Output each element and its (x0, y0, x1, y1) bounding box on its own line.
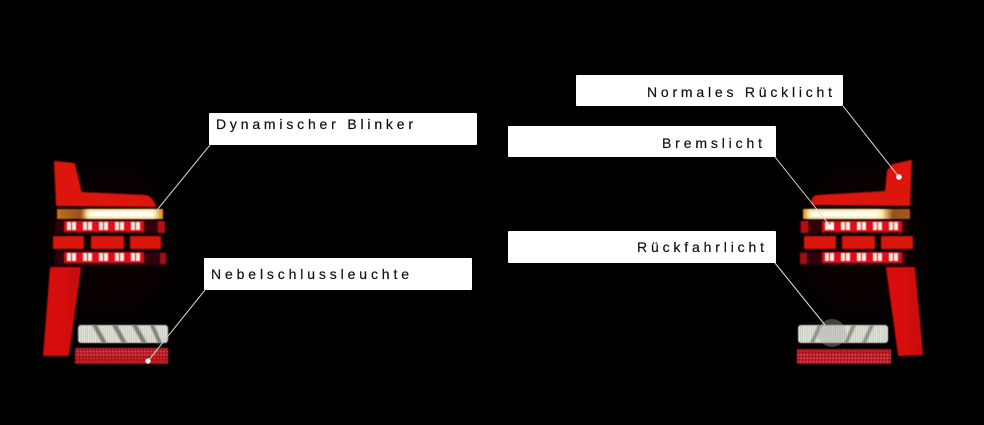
label: Rückfahrlicht (508, 231, 776, 263)
left LEDs row one (64, 221, 144, 232)
leader line: Bremslicht (775, 157, 834, 230)
label: Bremslicht: Bremslicht (662, 135, 762, 151)
left upper light guide (55, 162, 155, 206)
label: Rückfahrlicht: Rückfahrlicht (637, 239, 764, 255)
left fog light (75, 348, 168, 364)
reversing light marker highlight (818, 319, 846, 347)
right LEDs row two (800, 252, 907, 265)
left LEDs row two (55, 252, 166, 265)
left reversing light (78, 325, 168, 343)
label: Dynamischer Blinker (209, 113, 477, 145)
right LEDs row one (822, 221, 902, 232)
right reversing light (798, 325, 888, 343)
right fog light (797, 349, 891, 364)
leader line: Nebelschlussleuchte (145, 290, 205, 364)
left dynamic indicator bar (57, 209, 163, 219)
leader line: Rückfahrlicht (775, 263, 825, 325)
right tail lamp (795, 160, 925, 364)
leader line: Normales Rücklicht (843, 106, 902, 180)
right middle red blocks (804, 236, 913, 249)
left lower light guide (44, 268, 80, 355)
right brake light bar (803, 209, 910, 219)
right upper light guide (812, 161, 911, 205)
label: Dynamischer Blinker: Dynamischer Blinker (216, 116, 413, 132)
label: Normales Rücklicht (576, 75, 843, 106)
left middle red blocks (53, 236, 161, 249)
red glow behind right lamp (795, 160, 925, 320)
right lower light guide (887, 268, 922, 355)
right LED band one (800, 221, 907, 233)
label: Nebelschlussleuchte: Nebelschlussleuchte (211, 266, 409, 282)
left LED band one (55, 221, 165, 233)
label: Normales Rücklicht: Normales Rücklicht (647, 84, 832, 100)
label: Nebelschlussleuchte (204, 258, 472, 290)
leader line: Dynamischer Blinker (157, 145, 210, 210)
red glow behind left lamp (43, 160, 173, 320)
left tail lamp (43, 160, 173, 364)
label: Bremslicht (508, 126, 776, 157)
